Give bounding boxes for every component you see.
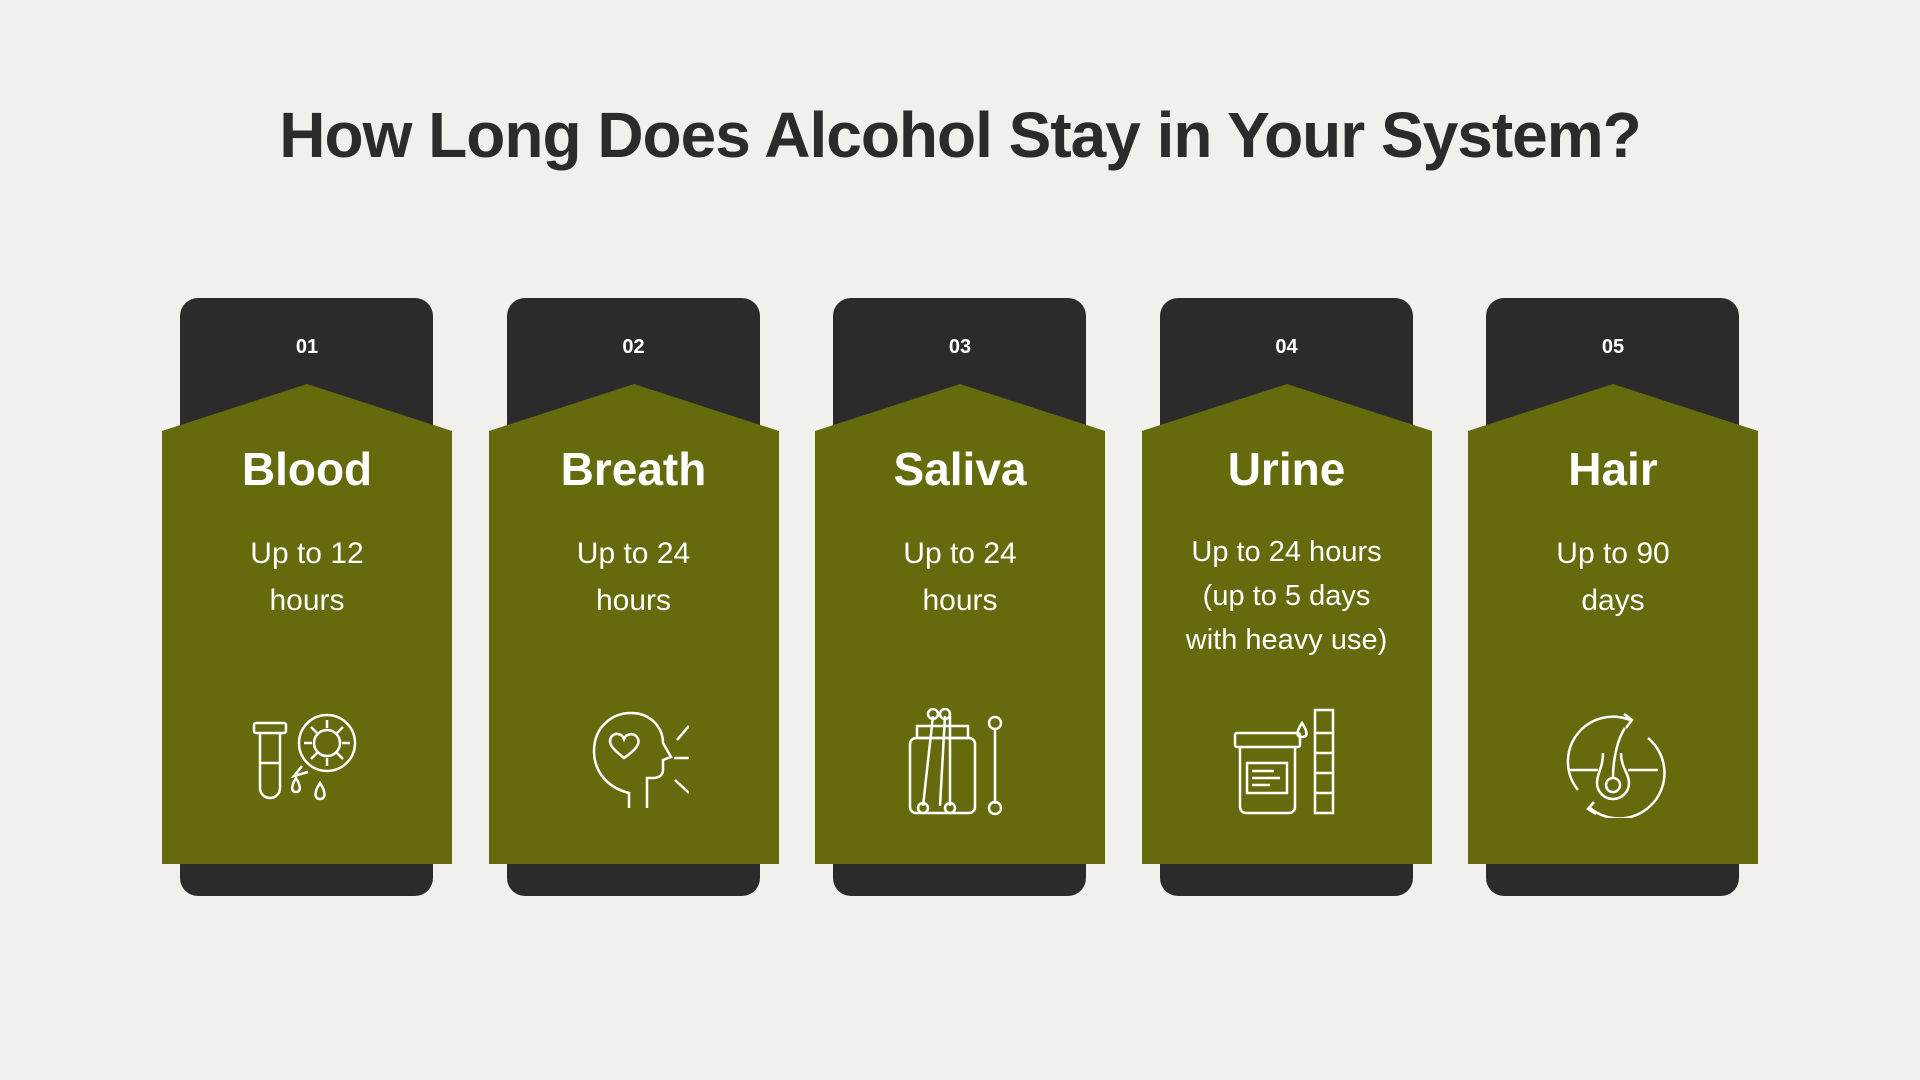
panel: breath: hours <box>596 584 671 617</box>
icon: swabs <box>908 708 1002 816</box>
panel: blood: 01 <box>296 336 318 358</box>
icon: urine cup <box>1234 708 1334 814</box>
panel: breath <box>489 298 779 896</box>
panel: blood: hours <box>269 584 345 617</box>
panel: hair: days <box>1581 584 1645 617</box>
icon: test tube <box>252 714 356 800</box>
panel: saliva: 03 <box>949 336 971 358</box>
panel: breath: Up to 24 <box>577 537 690 570</box>
panel: blood: Blood <box>242 443 372 495</box>
panel: blood <box>162 298 452 896</box>
title: How Long Does Alcohol Stay in Your System? <box>279 99 1641 171</box>
panel: saliva: Up to 24 <box>903 537 1017 570</box>
panel: hair: Hair <box>1568 443 1658 495</box>
panel: urine: with heavy use) <box>1186 624 1387 656</box>
panel: urine: (up to 5 days <box>1203 580 1370 612</box>
panel: urine: Up to 24 hours <box>1191 536 1382 568</box>
panel: urine: 04 <box>1275 336 1298 358</box>
panel: hair <box>1468 298 1758 896</box>
panel: hair: Up to 90 <box>1556 537 1670 570</box>
panel: urine <box>1142 298 1432 896</box>
panel: hair: 05 <box>1602 336 1624 358</box>
panel: saliva: hours <box>922 584 998 617</box>
panel: blood: Up to 12 <box>250 537 364 570</box>
panel: saliva <box>815 298 1105 896</box>
panel: breath: Breath <box>561 443 706 495</box>
icon: hair follicle <box>1566 713 1666 818</box>
panel: saliva: Saliva <box>894 443 1026 495</box>
icon: head <box>592 712 689 808</box>
panel: breath: 02 <box>622 336 645 358</box>
panel: urine: Urine <box>1228 443 1345 495</box>
